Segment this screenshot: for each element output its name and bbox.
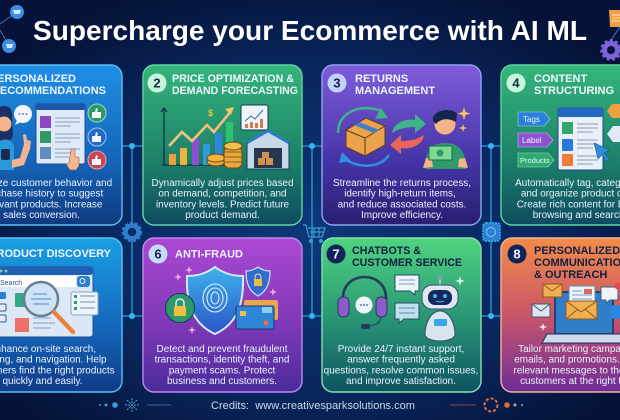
panel: price optimization [143, 65, 302, 225]
text: card 8 body [513, 344, 620, 387]
number badge 8 [508, 244, 526, 264]
footer ornament left [99, 398, 171, 412]
heading: card 3: MANAGEMENT [355, 85, 435, 97]
text: card 7 body: questions, resolve common issues, [324, 365, 478, 376]
text: card 2 body: Dynamically adjust prices based [152, 178, 293, 189]
icon: search window with magnifier: Search [0, 280, 22, 287]
heading: card 4: CONTENT [534, 73, 587, 85]
number badge 3: 3 [333, 76, 341, 90]
chart: rising bars with coins and warehouse [161, 105, 289, 169]
text: card 6 body: Detect and prevent fraudulent [157, 344, 288, 355]
number badge 7: 7 [332, 246, 340, 262]
text: card 7 body: and improve satisfaction. [346, 376, 456, 387]
title: Supercharge your Ecommerce with AI ML [33, 15, 587, 46]
text: card 4 body [515, 178, 620, 221]
text: card 7 body: answer frequently asked [347, 355, 455, 366]
text: card 1 body [0, 178, 112, 221]
text: card 3 body: Improve efficiency. [361, 210, 443, 221]
heading: card 8: PERSONALIZED [534, 245, 620, 257]
heading: card 2: DEMAND FORECASTING [172, 85, 298, 97]
icon: package returns and customer [338, 107, 470, 169]
text: card 2 body [152, 178, 293, 221]
heading: card 4 [534, 73, 614, 97]
icon: headset, chat bubbles and robot [338, 275, 465, 341]
heading: card 2: PRICE OPTIMIZATION & [172, 73, 294, 85]
text: card 2 body: product demand. [185, 210, 260, 221]
panel: product discovery [0, 238, 122, 392]
number badge 7 [326, 244, 346, 264]
icon: gear connector [123, 223, 141, 241]
icon: tagged content document: Label [522, 136, 542, 145]
text: card 3 body: Streamline the returns process, [333, 178, 471, 189]
text: card 1 body: sales conversion. [3, 210, 80, 221]
number badge 2 [148, 74, 166, 92]
heading: card 3: RETURNS [355, 73, 408, 85]
panel: chatbots [322, 238, 481, 392]
text: card 2 body: on demand, competition, and [158, 189, 287, 200]
panel: returns management [322, 65, 481, 225]
icon: tagged content document: Tags [523, 115, 540, 124]
text: card 2 body: inventory levels. Predict future [156, 199, 290, 210]
footer ornament right [450, 398, 523, 412]
text: card 3 body: and reduce associated costs. [338, 199, 466, 210]
panel: personalized recommendations [0, 65, 122, 225]
heading: card 3 [355, 73, 435, 97]
number badge 2: 2 [153, 76, 161, 90]
icon: fingerprint shield, lock and card [166, 266, 278, 334]
panel: content structuring [501, 65, 620, 225]
icon: shopper with product list [0, 104, 106, 170]
number badge 4: 4 [512, 76, 520, 90]
text: card 6 body: payment scams. Protect [169, 365, 276, 376]
icon: search window with magnifier [0, 267, 98, 337]
connector lines [122, 143, 501, 319]
icon: cart connector [303, 225, 325, 242]
icon: tagged content document [518, 104, 620, 170]
number badge 8: 8 [513, 246, 521, 262]
icon: chat and gear top right [602, 10, 620, 60]
heading: card 7: CHATBOTS & [352, 245, 421, 257]
text: card 3 body [333, 178, 471, 221]
text: card 6 body: transactions, identity theft, and [155, 355, 289, 366]
heading: card 8 [534, 245, 620, 281]
text: card 5 body: quickly and easily. [3, 376, 82, 387]
number badge 3 [328, 74, 346, 92]
icon: tagged content document: Products [520, 156, 550, 165]
number badge 4 [506, 74, 526, 92]
text: card 7 body: Provide 24/7 instant support, [338, 344, 464, 355]
number badge 6: 6 [154, 246, 162, 262]
text: card 6 body [155, 344, 289, 387]
heading: card 1 [0, 73, 106, 97]
heading: card 6: ANTI-FRAUD [175, 248, 243, 260]
heading: card 8: & OUTREACH [534, 269, 607, 281]
chart: rising bars with coins and warehouse: $ [208, 108, 213, 118]
heading: card 7: CUSTOMER SERVICE [352, 257, 462, 269]
icon: chip connector [483, 223, 500, 241]
heading: card 7 [352, 245, 462, 269]
heading: card 2 [172, 73, 298, 97]
text: card 6 body: business and customers. [167, 376, 277, 387]
text: card 3 body: identify high-return items, [344, 189, 456, 200]
panel: personalized communication [501, 238, 620, 392]
text: card 7 body [324, 344, 478, 387]
number badge 6 [148, 244, 168, 264]
text: card 5 body [0, 344, 115, 387]
panel: anti-fraud [143, 238, 302, 392]
credits: Credits: www.creativesparksolutions.com [211, 400, 415, 412]
heading: card 4: STRUCTURING [534, 85, 614, 97]
icon: network top left [0, 5, 24, 53]
icon: laptop with mail and notifications [532, 282, 620, 343]
